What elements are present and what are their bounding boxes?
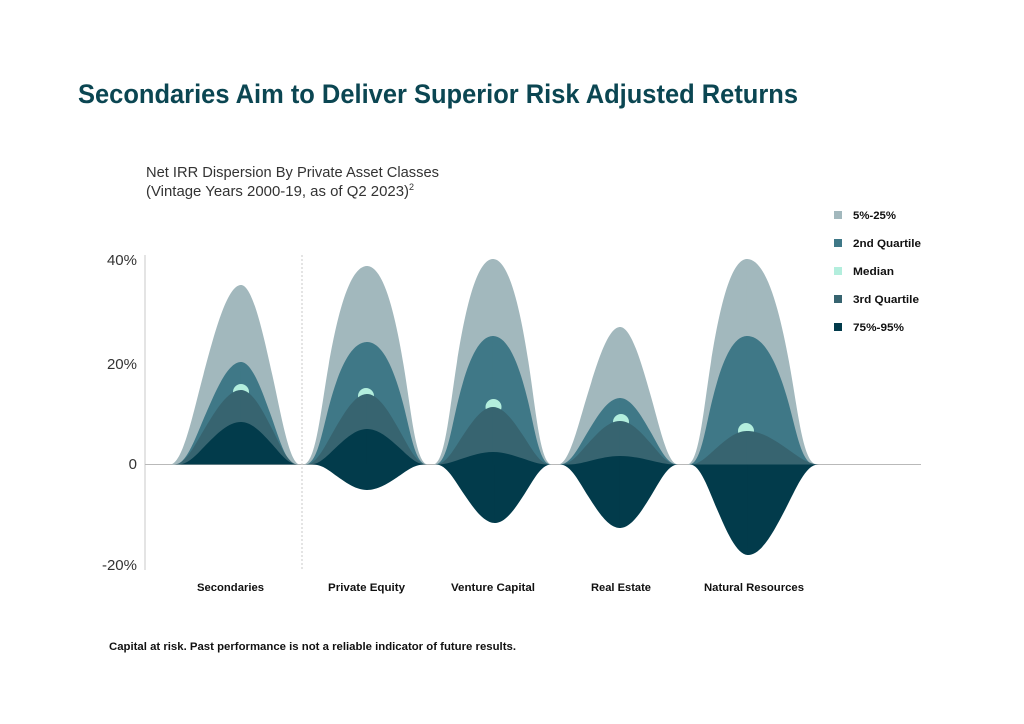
x axis labels bbox=[197, 582, 804, 594]
legend item: 75%-95%: 75%-95% bbox=[853, 322, 904, 334]
series: Secondaries bbox=[170, 285, 300, 464]
series: Real Estate bbox=[558, 327, 678, 528]
axes bbox=[145, 255, 921, 570]
y axis labels bbox=[102, 252, 137, 574]
y axis labels: 20% bbox=[107, 356, 137, 373]
legend item: Median: Median bbox=[853, 266, 894, 278]
chart subtitle: 2 bbox=[409, 182, 414, 192]
x axis labels: Real Estate bbox=[591, 582, 651, 594]
legend item: 2nd Quartile: 2nd Quartile bbox=[853, 238, 921, 250]
legend item: 5%-25%: 5%-25% bbox=[853, 210, 896, 222]
y axis labels: 0 bbox=[129, 456, 137, 473]
dispersion chart bbox=[170, 259, 820, 555]
title: Secondaries Aim to Deliver Superior Risk Adjusted Returns bbox=[78, 79, 798, 109]
series: Venture Capital bbox=[433, 259, 552, 523]
x axis labels: Venture Capital bbox=[451, 582, 535, 594]
series: Natural Resources bbox=[687, 259, 820, 555]
y axis labels: 40% bbox=[107, 252, 137, 269]
series: Private Equity bbox=[303, 266, 428, 490]
x axis labels: Private Equity bbox=[328, 582, 406, 594]
chart subtitle: Net IRR Dispersion By Private Asset Classes bbox=[146, 164, 439, 181]
chart subtitle: (Vintage Years 2000-19, as of Q2 2023) bbox=[146, 183, 409, 200]
chart subtitle bbox=[146, 164, 439, 200]
footnote: Capital at risk. Past performance is not a reliable indicator of future results. bbox=[109, 641, 516, 653]
legend item: 3rd Quartile: 3rd Quartile bbox=[853, 294, 919, 306]
x axis labels: Natural Resources bbox=[704, 582, 804, 594]
x axis labels: Secondaries bbox=[197, 582, 264, 594]
y axis labels: -20% bbox=[102, 557, 137, 574]
legend bbox=[834, 210, 921, 334]
